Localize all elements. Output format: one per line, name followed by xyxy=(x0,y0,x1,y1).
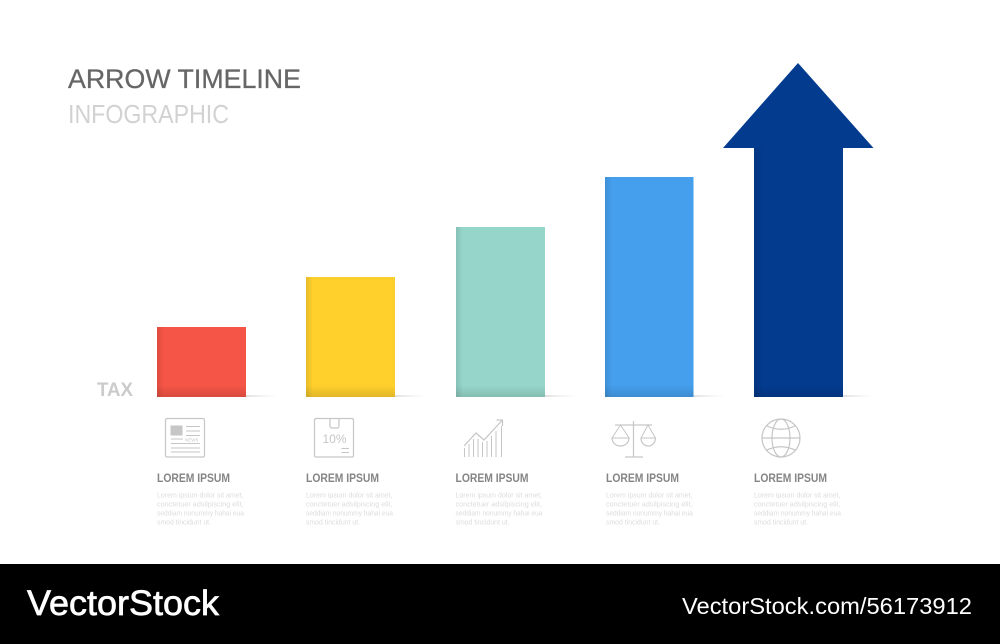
description: smod tincidunt ut. xyxy=(754,518,808,526)
footer url: VectorStock.com/56173912 xyxy=(682,593,972,619)
description: conctetuer adsilpiscing elit, xyxy=(754,500,840,508)
heading: infographic: INFOGRAPHIC xyxy=(68,99,229,129)
column: globe item xyxy=(754,419,841,526)
column: scales item xyxy=(606,421,693,526)
label: LOREM IPSUM xyxy=(157,473,230,485)
label: LOREM IPSUM xyxy=(754,473,827,485)
icon: newspaper: NEWS xyxy=(185,438,198,442)
description xyxy=(606,490,693,526)
heading: arrow timeline: ARROW TIMELINE xyxy=(68,64,301,94)
description: smod tincidunt ut. xyxy=(456,518,510,526)
icon: growth chart xyxy=(464,420,502,457)
description: smod tincidunt ut. xyxy=(606,518,660,526)
description: seddiam nonummy hahai eua xyxy=(606,508,693,518)
bar: teal xyxy=(456,227,577,397)
description: seddiam nonummy hahai eua xyxy=(456,508,542,518)
label: LOREM IPSUM xyxy=(456,473,528,485)
description: conctetuer adsilpiscing elit, xyxy=(606,500,692,508)
description: conctetuer adsilpiscing elit, xyxy=(306,500,392,508)
description: conctetuer adsilpiscing elit, xyxy=(456,500,542,508)
bar: yellow xyxy=(306,277,427,397)
description: Lorem ipsum dolor sit amet, xyxy=(306,490,392,500)
footer logo: VectorStock xyxy=(27,584,220,623)
description: seddiam nonummy hahai eua xyxy=(157,508,244,518)
description xyxy=(456,490,542,526)
description: seddiam nonummy hahai eua xyxy=(306,508,393,518)
description: seddiam nonummy hahai eua xyxy=(754,508,841,518)
icon: box with 10%: 10% xyxy=(322,432,347,446)
description: Lorem ipsum dolor sit amet, xyxy=(456,490,542,500)
column: growth chart item xyxy=(456,420,542,526)
label: LOREM IPSUM xyxy=(306,473,379,485)
description: Lorem ipsum dolor sit amet, xyxy=(754,490,840,500)
description xyxy=(754,490,841,526)
footer bar xyxy=(0,564,1000,644)
column: box item xyxy=(306,418,393,526)
description: conctetuer adsilpiscing elit, xyxy=(157,500,244,508)
description: smod tincidunt ut. xyxy=(306,518,360,526)
description: smod tincidunt ut. xyxy=(157,518,211,526)
description xyxy=(306,490,393,526)
description xyxy=(157,490,244,526)
description: Lorem ipsum dolor sit amet, xyxy=(606,490,692,500)
arrow: dark blue xyxy=(723,63,874,397)
icon: globe xyxy=(762,419,800,457)
label: LOREM IPSUM xyxy=(606,473,679,485)
bar: light blue xyxy=(605,177,725,397)
description: Lorem ipsum dolor sit amet, xyxy=(157,490,244,500)
title xyxy=(68,64,301,129)
icon: balance scales xyxy=(612,421,656,457)
column: newspaper item xyxy=(157,418,244,526)
axis label: tax: TAX xyxy=(97,380,133,401)
bar: red xyxy=(157,327,278,397)
